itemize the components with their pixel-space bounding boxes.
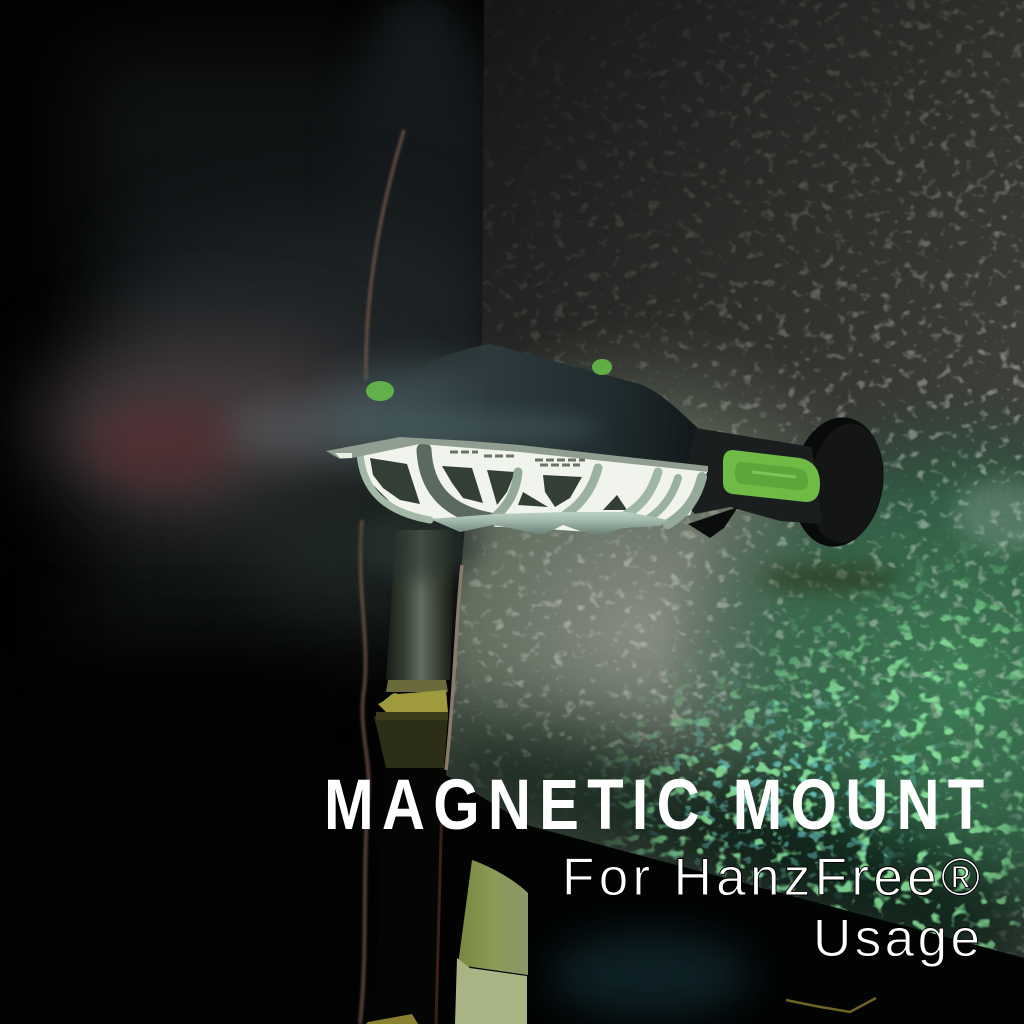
lamp body: [400, 344, 718, 500]
green button right: [592, 359, 612, 375]
subheading line two: Usage: [813, 909, 980, 968]
heading: magnetic mount: MAGNETIC MOUNT: [324, 765, 984, 844]
background haze: [0, 0, 500, 1024]
lower shadow region with teal reflection: [530, 826, 1024, 1024]
handle: [680, 428, 822, 524]
cage rim: [326, 437, 708, 472]
pipe: [360, 510, 480, 1024]
green grip pad: [723, 450, 820, 502]
pale tube: [366, 860, 528, 1024]
switch: [688, 507, 738, 538]
green button left: [366, 381, 394, 401]
lamp cage: [326, 437, 708, 537]
cage lit core: [362, 441, 708, 532]
magnet base: [784, 411, 892, 553]
subheading line one: For HanzFree®: [562, 848, 980, 907]
metal wall with speckled texture: [446, 0, 1024, 958]
copper strip: [446, 565, 462, 770]
cage chrome ribs: [360, 450, 702, 524]
grille slots: [450, 452, 585, 465]
cage scalloped bottom: [430, 512, 668, 537]
work light: [320, 344, 892, 553]
brass fitting: [378, 690, 448, 712]
wire behind lamp: [360, 130, 404, 1024]
cage dark windows: [370, 458, 627, 510]
light halo: [320, 365, 540, 465]
title text: [324, 765, 984, 968]
